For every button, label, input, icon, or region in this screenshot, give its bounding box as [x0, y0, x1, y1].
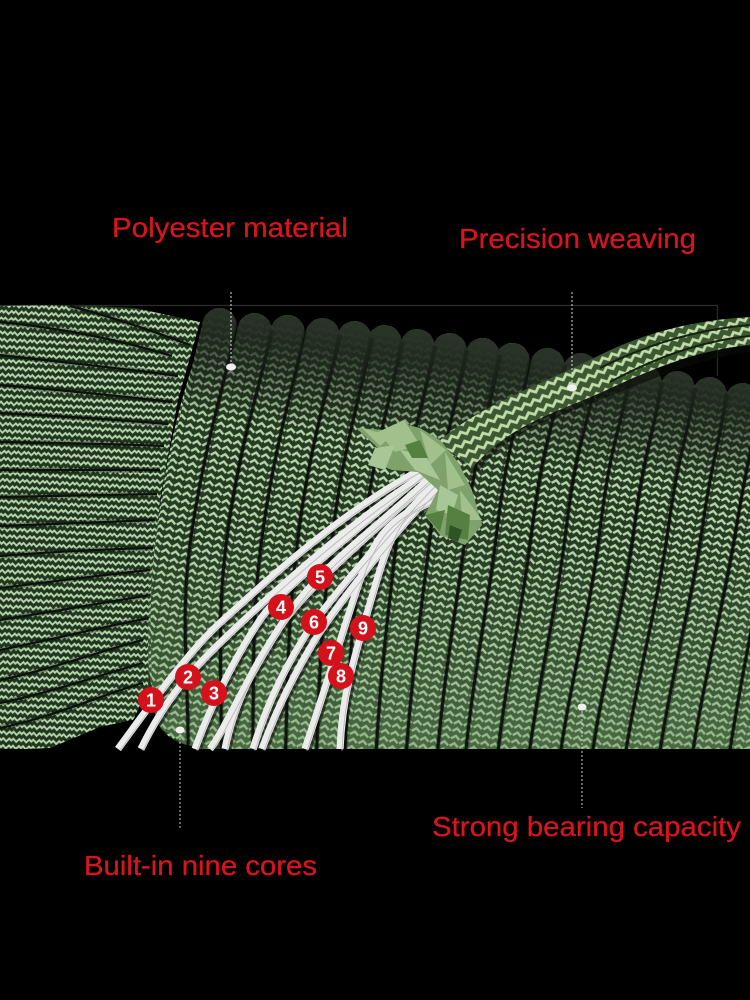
marker 6: [301, 609, 327, 635]
marker 3: [201, 680, 227, 706]
number markers 1 to 9: [138, 564, 376, 713]
infographic canvas: [0, 216, 750, 876]
marker 7: 7: [326, 644, 336, 664]
label: strong bearing capacity: Strong bearing capacity: [432, 811, 741, 842]
label: built-in nine cores: Built-in nine cores: [84, 850, 317, 881]
leader: polyester material: [226, 292, 236, 370]
pulled-out cord: [438, 317, 750, 472]
frame line behind rope: [0, 306, 718, 376]
leader: precision weaving: [567, 292, 577, 392]
marker 3: 3: [209, 684, 219, 704]
marker 4: [268, 594, 294, 620]
marker 5: 5: [315, 568, 325, 588]
leader: strong bearing capacity: [578, 704, 586, 808]
marker 8: 8: [336, 666, 346, 686]
black wedge under the spool's lower left: [99, 712, 193, 749]
main spool: vertical rope wraps: [148, 325, 750, 770]
marker 4: 4: [276, 598, 286, 618]
leader: built-in nine cores: [176, 726, 184, 828]
marker 9: [350, 615, 376, 641]
label: precision weaving: Precision weaving: [459, 223, 696, 254]
spool body below the scalloped top: [148, 340, 750, 750]
left coil: horizontal rope wraps: [0, 305, 200, 750]
frayed green sheath: [356, 420, 482, 545]
marker 1: 1: [146, 690, 156, 710]
marker 8: [328, 663, 354, 689]
marker 1: [138, 687, 164, 713]
marker 2: [175, 664, 201, 690]
nine white inner core strands: [118, 465, 442, 750]
marker 9: 9: [358, 618, 368, 638]
rope coil photo: [0, 305, 750, 770]
marker 5: [307, 564, 333, 590]
label: polyester material: Polyester material: [112, 212, 348, 243]
marker 2: 2: [183, 668, 193, 688]
marker 7: [318, 640, 344, 666]
marker 6: 6: [309, 612, 319, 632]
